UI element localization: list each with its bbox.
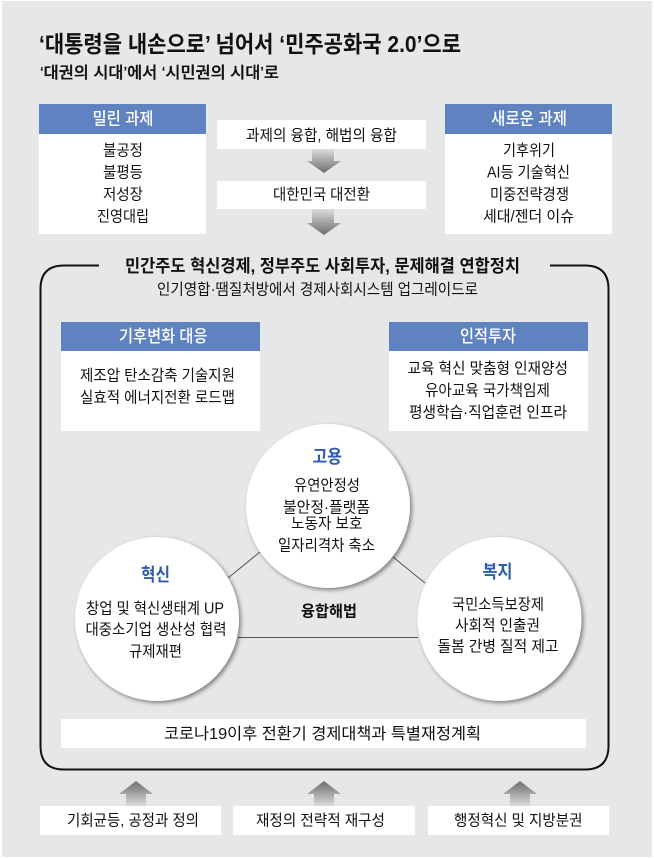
list: overdue tasks: 불평등 xyxy=(103,164,143,182)
arrow: down 1 xyxy=(307,149,341,173)
subheading: container: 인기영합·땜질처방에서 경제사회시스템 업그레이드로 xyxy=(157,280,478,298)
heading: new tasks: 새로운 과제 xyxy=(491,110,567,128)
list: employment: 유연안정성 xyxy=(294,476,360,494)
list: innovation: 대중소기업 생산성 협력 xyxy=(86,620,226,638)
list: new tasks: AI등 기술혁신 xyxy=(487,164,570,182)
list: employment: 불안정·플랫폼 xyxy=(283,498,370,516)
frame: rounded container xyxy=(40,266,608,770)
list: climate response xyxy=(80,366,235,406)
label: convergent solutions: 융합해법 xyxy=(301,602,357,620)
list: innovation: 규제재편 xyxy=(129,642,182,660)
box: convergence of tasks and solutions xyxy=(217,120,426,149)
heading: employment: 고용 xyxy=(312,447,342,467)
list: employment: 노동자 보호 xyxy=(291,514,362,532)
list: human investment: 교육 혁신 맞춤형 인재양성 xyxy=(408,360,568,378)
box: fiscal restructuring: 재정의 전략적 재구성 xyxy=(256,812,385,830)
box: administrative innovation xyxy=(428,806,609,835)
heading: climate response: 기후변화 대응 xyxy=(119,327,208,346)
arrow: up left xyxy=(119,781,153,806)
list: new tasks: 미중전략경쟁 xyxy=(490,186,569,204)
list: new tasks: 기후위기 xyxy=(503,142,555,160)
list: human investment xyxy=(408,360,568,422)
heading: welfare: 복지 xyxy=(482,562,512,582)
arrow: up center xyxy=(307,781,341,806)
subtitle: ‘대권의 시대’에서 ‘시민권의 시대’로 xyxy=(40,64,279,82)
bar: post-COVID plan xyxy=(61,719,586,748)
bar: post-COVID plan: 코로나19이후 전환기 경제대책과 특별재정계획 xyxy=(164,725,481,743)
list: employment xyxy=(278,476,375,554)
list: climate response: 제조압 탄소감축 기술지원 xyxy=(80,366,235,384)
circle: innovation xyxy=(75,537,239,701)
panel: human investment xyxy=(389,322,588,431)
box: convergence of tasks and solutions: 과제의 융합, 해법의 융합 xyxy=(246,126,397,144)
box: equal opportunity xyxy=(40,806,221,835)
list: overdue tasks xyxy=(97,142,149,226)
list: human investment: 유아교육 국가책임제 xyxy=(425,382,550,400)
box: equal opportunity: 기회균등, 공정과 정의 xyxy=(67,812,199,830)
box: fiscal restructuring xyxy=(233,806,415,835)
circle: welfare xyxy=(418,537,582,701)
list: human investment: 평생학습·직업훈련 인프라 xyxy=(409,404,567,422)
title: ‘대통령을 내손으로’ 넘어서 ‘민주공화국 2.0’으로 xyxy=(39,31,461,57)
list: new tasks: 세대/젠더 이슈 xyxy=(483,208,574,226)
panel: overdue tasks xyxy=(39,104,206,234)
heading: human investment: 인적투자 xyxy=(460,327,516,346)
list: new tasks xyxy=(483,142,574,226)
heading: container: 민간주도 혁신경제, 정부주도 사회투자, 문제해결 연합정치 xyxy=(125,256,520,276)
heading: innovation: 혁신 xyxy=(141,565,170,585)
heading: overdue tasks: 밀린 과제 xyxy=(92,110,154,128)
box: great transformation xyxy=(217,181,426,209)
list: employment: 일자리격차 축소 xyxy=(278,536,375,554)
list: climate response: 실효적 에너지전환 로드맵 xyxy=(80,388,235,406)
list: overdue tasks: 불공정 xyxy=(103,142,143,160)
list: welfare: 돌봄 간병 질적 제고 xyxy=(438,638,558,656)
panel: climate response xyxy=(61,322,260,431)
connector lines xyxy=(228,552,425,638)
panel: new tasks xyxy=(445,104,612,234)
list: welfare xyxy=(438,596,558,656)
box: great transformation: 대한민국 대전환 xyxy=(273,186,370,204)
list: innovation xyxy=(86,600,226,660)
list: welfare: 국민소득보장제 xyxy=(452,596,544,614)
list: overdue tasks: 저성장 xyxy=(103,186,143,204)
list: innovation: 창업 및 혁신생태계 UP xyxy=(86,600,224,618)
arrow: down 2 xyxy=(307,209,341,235)
circle: employment xyxy=(246,424,410,588)
list: welfare: 사회적 인출권 xyxy=(455,616,540,634)
arrow: up right xyxy=(503,781,537,806)
list: overdue tasks: 진영대립 xyxy=(97,208,149,226)
box: administrative innovation: 행정혁신 및 지방분권 xyxy=(454,812,582,830)
